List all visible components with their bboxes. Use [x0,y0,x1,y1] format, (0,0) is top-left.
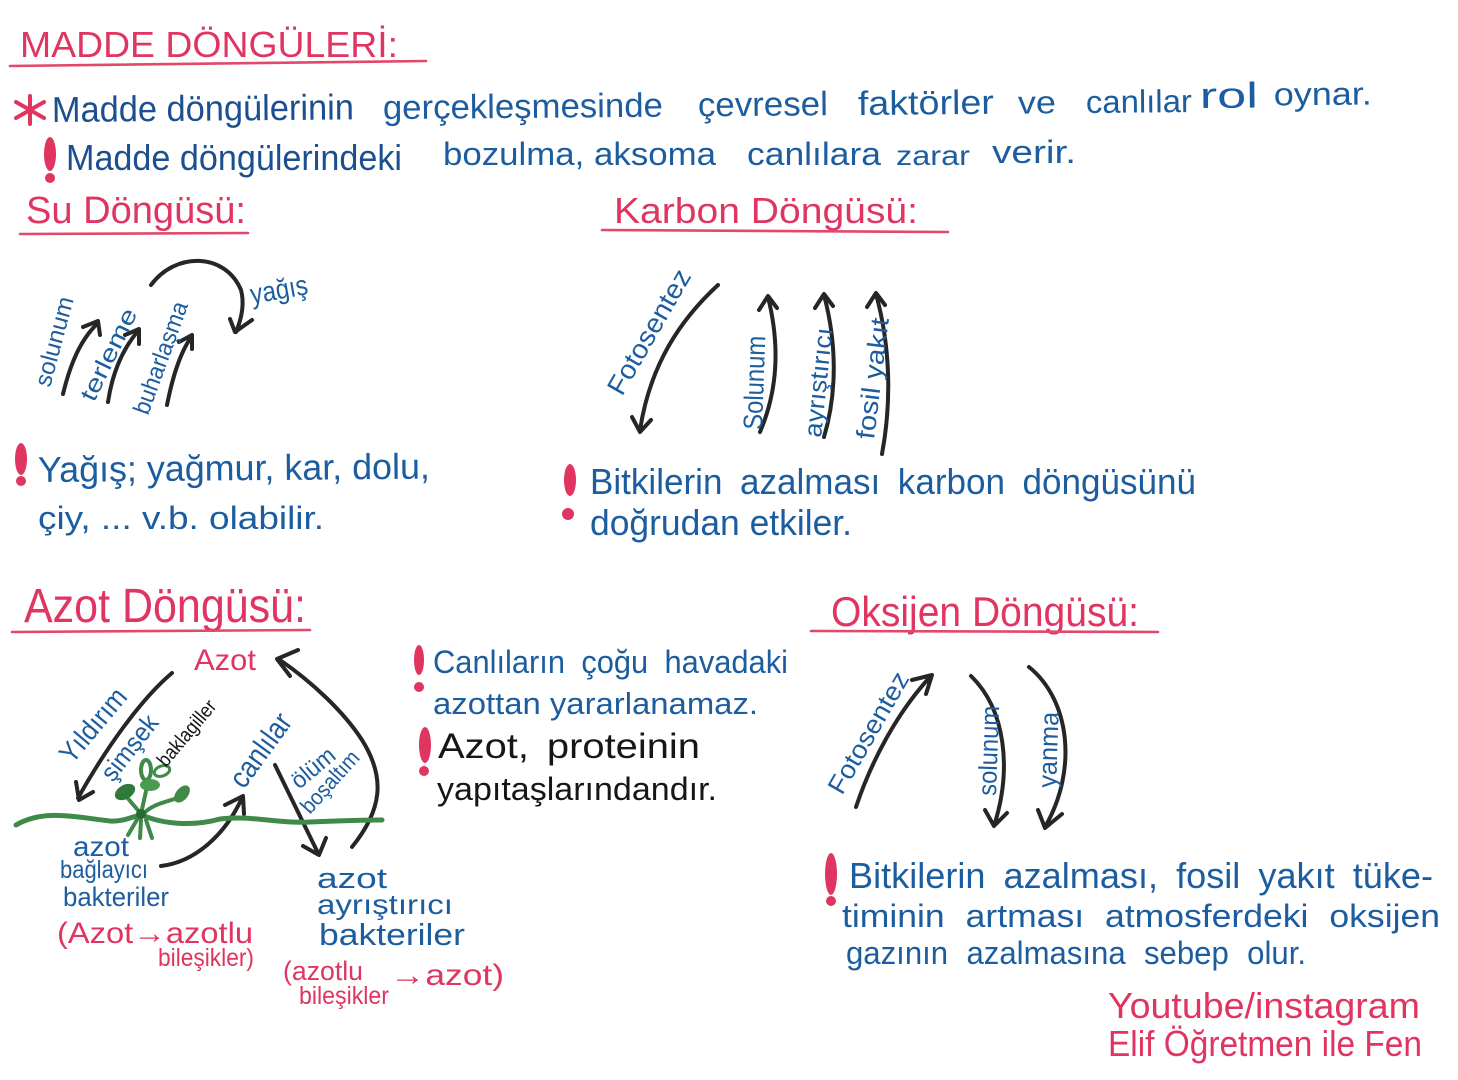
intro line 2: canlılara [747,136,881,172]
credit: Elif Öğretmen ile Fen [1108,1023,1422,1064]
intro line 1: faktörler [858,84,994,123]
diagram: oxygen cycle [821,666,1065,828]
diagram: carbon cycle [601,264,895,454]
arrow: ayrıştırıcı [815,294,834,437]
label: ölüm: ölüm [286,742,341,795]
title: MADDE DÖNGÜLERİ: [20,24,398,65]
label: azot bağlayıcı bakteriler: bağlayıcı [60,856,148,884]
label: azotlu bileşikler to azot: bileşikler [299,982,389,1010]
label: Azot: Azot [194,644,257,677]
label: azot bağlayıcı bakteriler [60,831,169,912]
arrow: bacteria to canlılar [161,796,244,866]
note: karbon [562,461,1196,543]
credit: Youtube/instagram [1108,985,1420,1026]
label: azotlu bileşikler to azot: →azot) [390,959,504,992]
arrow: canlılar down [275,765,326,855]
intro line 1: canlılar [1086,83,1192,120]
intro line 1 [52,73,1372,130]
arrow: fotosentez [632,285,718,432]
label: azot to azotlu bileşikler: bileşikler) [158,944,254,972]
icon: exclamation black note [419,727,431,776]
note: oksijen: Bitkilerin azalması, fosil yakıt tüke- [849,855,1433,896]
label: ayrıştırıcı: ayrıştırıcı [799,326,838,439]
label: azot ayrıştırıcı bakteriler: azot [317,863,387,895]
label: buhorlaşma: buharlaşma [128,297,194,418]
label: azot ayrıştırıcı bakteriler: bakteriler [319,917,465,952]
note: karbon: doğrudan etkiler. [590,502,852,543]
intro line 1: ve [1018,84,1056,121]
note: yağış: Yağış; yağmur, kar, dolu, [38,446,430,490]
label: canlılar: canlılar [223,707,299,794]
intro line 1: çevresel [698,85,828,124]
intro line 1: rol [1200,74,1258,116]
note: oksijen: gazının azalmasına sebep olur. [846,935,1306,971]
intro line 1: Madde döngülerinin [52,86,354,130]
note: azot: Canlıların çoğu havadaki [433,644,788,680]
arrow: fosil yakıt [867,293,888,454]
label: azotlu bileşikler to azot: (azotlu [283,956,363,986]
label: boşaltım: boşaltım [295,745,365,818]
soil line [16,815,382,825]
note: azot: yapıtaşlarındandır. [437,771,717,807]
label: yanma: yanma [1032,711,1065,788]
heading: Su Döngüsü: Su Döngüsü: [26,190,246,232]
icon: exclamation [15,443,27,486]
arrow: Azot to soil [76,673,172,800]
note: azot: Azot, proteinin [438,727,700,766]
label: Fotosentez: Fotosentez [601,264,697,400]
note: azot [414,644,788,807]
intro line 2: Madde döngülerindeki [66,137,402,178]
icon: plant [112,760,193,838]
diagram: nitrogen cycle [16,644,504,1010]
intro line 2: verir. [992,134,1076,170]
heading: Karbon Döngüsü: Karbon Döngüsü: [614,190,918,231]
arrow: solunum [971,676,1007,826]
arrow: yağış [151,261,252,332]
heading: Oksijen Döngüsü: Oksijen Döngüsü: [831,588,1139,635]
heading: Azot Döngüsü: Azot Döngüsü: [24,580,306,633]
icon: exclamation blue note [414,645,424,692]
icon: exclamation [562,464,576,520]
note: oksijen: timinin artması atmosferdeki oksijen [842,898,1440,934]
arrow: return to Azot [277,650,378,847]
diagram: water cycle [30,261,310,418]
intro line 2: bozulma, aksoma [443,136,716,172]
icon: asterisk [16,96,44,124]
intro text [16,73,1372,183]
label: terleme: terleme [75,304,143,406]
label: Fotosentez: Fotosentez [821,666,915,799]
label: azot to azotlu bileşikler [57,917,254,972]
label: azotlu bileşikler to azot [283,956,504,1010]
note: oksijen [825,853,1440,971]
arrow: solunum [759,296,777,432]
label: baklagiller: baklagiller [153,696,221,771]
label: yağış: yağış [248,269,310,310]
note: azot: azottan yararlanamaz. [433,686,758,721]
arrow: fotosentez [856,675,932,807]
arrow: buhorlaşma [167,335,192,405]
label: şimşek: şimşek [94,708,165,787]
note: yağış [15,443,430,536]
label: azot ayrıştırıcı bakteriler [317,863,465,952]
label: azot bağlayıcı bakteriler: azot [73,831,129,862]
label: solunum: solunum [30,294,80,390]
icon: exclamation [825,853,837,906]
intro line 2: zarar [896,140,970,171]
note: karbon: Bitkilerin azalması karbon döngüsünü [590,461,1196,502]
intro line 1: oynar. [1274,75,1372,112]
arrow: yanma [1029,667,1065,828]
credit [1108,985,1422,1064]
intro line 2 [66,134,1076,178]
label: Yıldırım: Yıldırım [53,682,133,769]
label: Solunum: Solunum [738,335,771,430]
label: azot ayrıştırıcı bakteriler: ayrıştırıcı [317,889,453,920]
label: azot bağlayıcı bakteriler: bakteriler [63,882,169,912]
note: yağış: çiy, ... v.b. olabilir. [38,500,324,536]
label: fosil yakıt: fosil yakıt [850,315,895,441]
intro line 1: gerçekleşmesinde [383,87,663,127]
label: solunum: solunum [972,705,1005,796]
arrow: solunum [63,321,100,394]
label: azot to azotlu bileşikler: (Azot→azotlu [57,917,253,950]
icon: exclamation 1 [44,137,56,183]
arrow: terleme [108,329,139,402]
